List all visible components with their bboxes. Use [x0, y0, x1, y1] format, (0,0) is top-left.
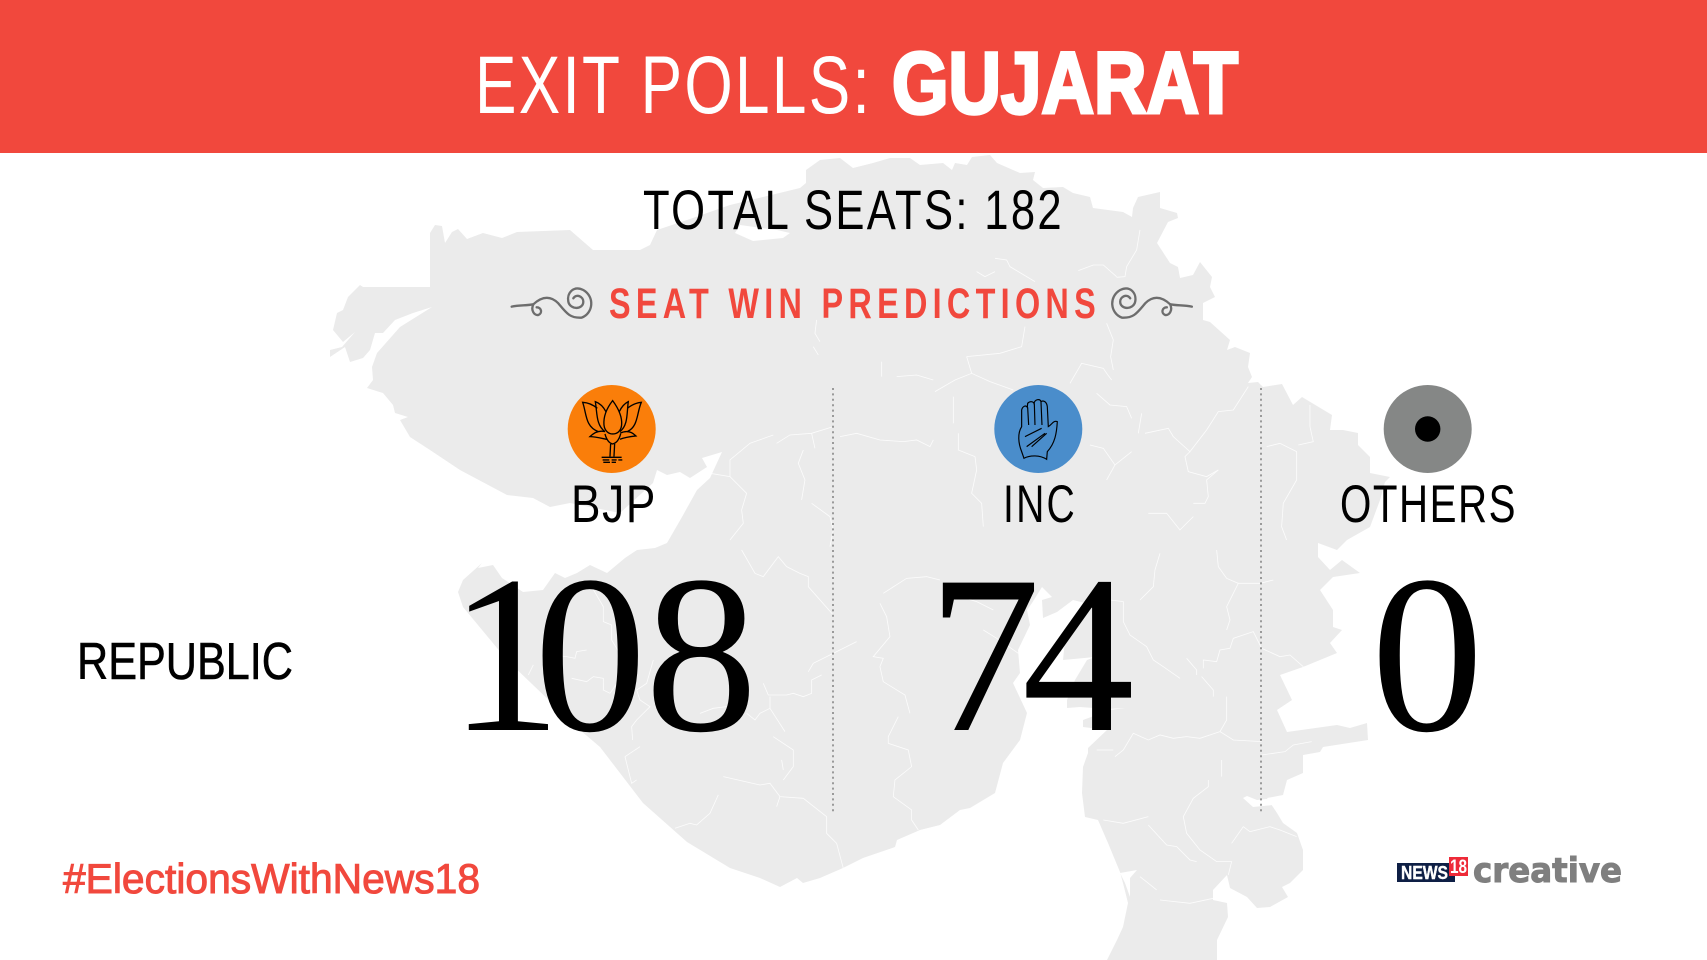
icon: others dot	[1384, 385, 1472, 473]
title	[475, 35, 1238, 132]
icon: BJP lotus	[568, 385, 656, 473]
logo: News18 creative: NEWS	[1401, 863, 1448, 883]
map: district borders, west	[710, 320, 833, 547]
title: EXIT POLLS:	[475, 40, 872, 131]
column: BJP	[449, 385, 758, 779]
map: district borders, north-east	[840, 230, 1313, 540]
logo: News18 creative: 18	[1450, 857, 1467, 878]
label: BJP: BJP	[571, 475, 657, 534]
column dividers	[833, 388, 1261, 814]
row label: Republic: REPUBLIC	[77, 633, 293, 691]
label: INC: INC	[1003, 475, 1077, 534]
number: BJP seats: 108	[449, 529, 758, 779]
number: others seats: 0	[1371, 529, 1484, 779]
icon: INC hand	[994, 385, 1082, 473]
logo: News18 creative	[1397, 851, 1622, 891]
header banner	[0, 0, 1707, 153]
total seats heading: TOTAL SEATS: 182	[643, 178, 1064, 241]
number: INC seats: 74	[928, 529, 1134, 779]
logo: News18 creative: creative	[1473, 851, 1622, 891]
map: district borders, Saurashtra	[528, 550, 940, 868]
title: GUJARAT	[892, 35, 1238, 132]
column: INC	[928, 385, 1134, 779]
ornament: right swirl	[1112, 288, 1192, 318]
heading: seat win predictions: SEAT WIN PREDICTIONS	[609, 280, 1101, 328]
ornament: left swirl	[512, 288, 591, 318]
column: others	[1340, 385, 1517, 779]
label: OTHERS: OTHERS	[1340, 475, 1517, 534]
map: Gujarat silhouette	[330, 155, 1390, 960]
section heading with ornaments	[512, 280, 1192, 328]
map: district borders, south	[960, 550, 1312, 903]
hashtag: #ElectionsWithNews18	[63, 855, 480, 902]
